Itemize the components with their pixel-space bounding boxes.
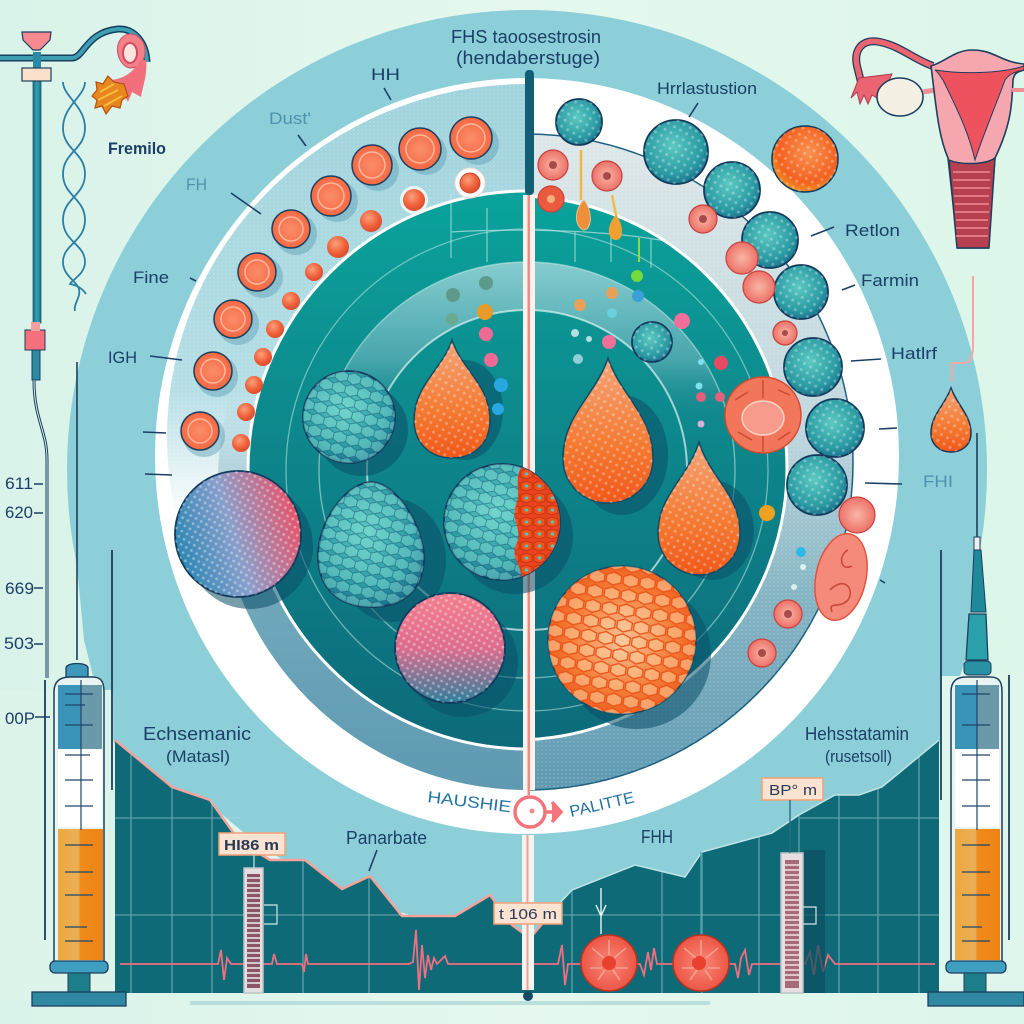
- labels: left scale numbers: 611: [5, 474, 33, 493]
- labels: chart annotations: Echsemanic: [143, 724, 251, 744]
- panel: right grey-blue band: [530, 133, 854, 791]
- icon: teal pear-shaped cell: [318, 482, 424, 607]
- labels: upper left callouts: HH: [371, 65, 400, 84]
- heading: main title: [451, 27, 601, 68]
- icon: large orange cellular sphere: [548, 566, 696, 714]
- labels: chart annotations: (rusetsoll): [825, 747, 892, 766]
- labels: chart annotations: (Matasl): [166, 747, 230, 766]
- panel: lower left grey-blue band: [218, 417, 523, 790]
- icon: left syringe: [32, 362, 126, 1006]
- icon: pink-blue sphere: [175, 471, 301, 597]
- labels: left scale numbers: [4, 474, 50, 728]
- icon: uterus: [851, 41, 1024, 248]
- panel: left side column behind syringe: [0, 690, 115, 1000]
- chart: value tags: [219, 778, 823, 924]
- panel: ovulation droplets and small particles: [446, 150, 806, 590]
- labels: chart annotations: FHH: [641, 827, 673, 847]
- panel: teal concentric rings: [243, 191, 806, 749]
- labels: upper right callouts: Hatlrf: [891, 344, 937, 363]
- heading: main title: FHS taoosestrosin: [451, 27, 601, 47]
- panel: upper left light band: [167, 84, 525, 506]
- chart: hormone level area: [115, 740, 940, 993]
- icon: ovary and fimbria: [92, 34, 146, 114]
- labels: upper right callouts: Hrrlastustion: [657, 79, 757, 98]
- labels: left scale numbers: 669: [5, 579, 34, 598]
- heading: main title: (hendaberstuge): [456, 48, 600, 68]
- icon: small orange droplet: [931, 388, 971, 452]
- labels: chart annotations: Panarbate: [346, 828, 427, 848]
- labels: upper right callouts: FHI: [923, 472, 953, 491]
- icon: teal sphere with ruptured orange side: [444, 464, 560, 580]
- icon: large corpus coral sphere: [725, 377, 801, 453]
- labels: upper right callouts: [657, 79, 953, 583]
- icon: orange drop 1: [414, 340, 490, 458]
- chart element: sphere shadows: [187, 360, 754, 729]
- icon: IV pole: [0, 29, 147, 678]
- labels: ring captions and female symbol: PALITTE: [568, 789, 636, 821]
- panel: right side column behind syringe: [940, 676, 1024, 1000]
- labels: upper left callouts: IGH: [108, 348, 137, 367]
- chart: left thermometer gauge: [244, 855, 277, 993]
- icon: pills on ECG: [581, 852, 729, 991]
- icon: pink sphere: [395, 593, 505, 703]
- icon: orange drop 3: [658, 442, 740, 575]
- labels: upper right callouts: Farmin: [861, 271, 919, 290]
- icon: corpus albicans oval: [807, 529, 875, 625]
- labels: upper right callouts: Retlon: [845, 221, 900, 240]
- panel: coral small balls, inner arc: [232, 168, 485, 452]
- labels: chart annotations: Hehsstatamin: [805, 724, 909, 744]
- labels: left scale numbers: 503: [4, 634, 34, 653]
- labels: upper left callouts: FH: [186, 175, 207, 194]
- labels: ring captions and female symbol: HAUSHIE: [427, 789, 512, 816]
- icon: orange drop 2: [563, 358, 653, 503]
- labels: upper left callouts: [108, 65, 400, 475]
- chart: value tags: BP° m: [769, 782, 817, 799]
- chart: value tags: HI86 m: [224, 837, 279, 854]
- base shadow line: [190, 1001, 710, 1005]
- labels: ring captions and female symbol: [427, 789, 636, 827]
- icon: right pink connector line: [952, 276, 973, 382]
- labels: left scale numbers: 620: [5, 503, 33, 522]
- panel: pink cells on right arc: [538, 150, 875, 667]
- icon: orange follicle: [772, 126, 838, 192]
- icon: right syringe: [928, 433, 1024, 1006]
- divider: centre axis: [522, 70, 535, 1001]
- labels: upper left callouts: Fine: [133, 268, 169, 287]
- icon: textured teal sphere: [303, 371, 395, 463]
- labels: left scale numbers: 00P: [5, 709, 35, 728]
- labels: upper left callouts: Dust': [269, 109, 311, 128]
- chart: ECG trace: [120, 930, 935, 990]
- labels: chart annotations: [143, 724, 909, 871]
- panel: white ring: [155, 78, 899, 834]
- icon: DNA helix: [63, 82, 86, 311]
- panel: coral follicles, outer arc: [181, 117, 499, 457]
- labels: upper left callouts: Fremilo: [108, 139, 166, 158]
- panel: right teal spheres: [556, 99, 864, 515]
- chart: value tags: t 106 m: [499, 906, 557, 923]
- chart: right thermometer gauge: [781, 800, 825, 993]
